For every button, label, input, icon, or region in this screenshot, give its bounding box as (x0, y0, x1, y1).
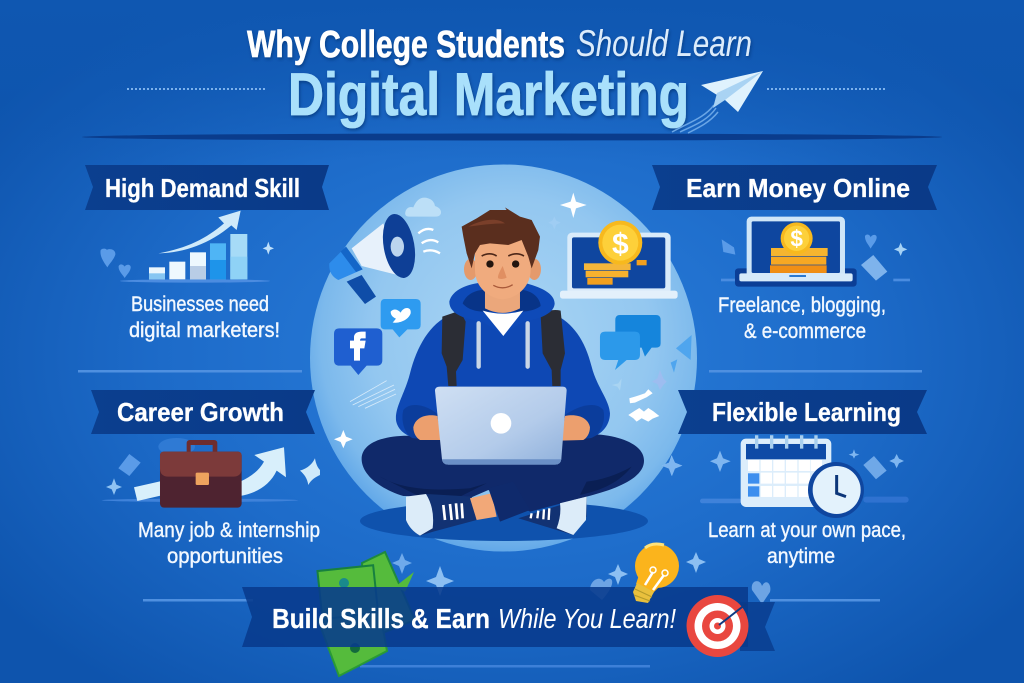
text: businesses need: Businesses need (131, 293, 269, 316)
text: freelance: Freelance, blogging, (718, 294, 886, 317)
shoe left (406, 494, 477, 536)
backpack straps (442, 311, 466, 386)
panel: high demand skill (85, 165, 329, 342)
laptop (435, 387, 567, 465)
icon: light bulb (633, 544, 679, 603)
panel: earn money online (652, 165, 937, 343)
hands (413, 415, 442, 440)
ribbon: flexible learning (678, 390, 927, 434)
text: learn at your own pace: anytime (767, 545, 835, 568)
icon: decorative sparkles and hearts near banner (392, 552, 770, 604)
central disc (310, 164, 697, 552)
ears (464, 259, 477, 280)
text: many job (138, 519, 320, 568)
icon: laptop with coins (560, 221, 678, 299)
hair (462, 207, 540, 268)
ribbon: high demand skill (85, 165, 329, 210)
panel: flexible learning (662, 390, 927, 568)
text: freelance: & e-commerce (744, 320, 866, 343)
central student illustration (329, 193, 692, 541)
title (247, 23, 752, 128)
dollar sign: $ (790, 226, 803, 252)
text: businesses need (129, 293, 280, 342)
text: learn at your own pace: Learn at your own pace, (708, 519, 906, 542)
icon: megaphone (329, 211, 440, 304)
title line two: Digital Marketing (288, 61, 689, 128)
ankle (470, 493, 497, 520)
text: freelance (718, 294, 886, 343)
icon: twitter bubble (381, 299, 421, 337)
panel: career growth (91, 390, 320, 568)
title line one: Why College Students (247, 24, 565, 66)
icon: facebook bubble (334, 328, 382, 375)
icon: cloud (405, 198, 441, 217)
banner tail (740, 602, 775, 651)
banner text (272, 603, 676, 634)
scribble lines (350, 381, 396, 408)
legs (362, 434, 644, 512)
ground shadow (360, 501, 648, 541)
text: learn at your own pace (708, 519, 906, 568)
icon: briefcase and arrow (102, 438, 320, 508)
neck (485, 290, 520, 313)
text: many job: opportunities (167, 545, 283, 568)
text: many job: Many job & internship (138, 519, 320, 542)
icon: cash notes (317, 552, 415, 676)
icon: target (686, 595, 748, 657)
icon: chat bubbles (600, 315, 661, 370)
eyes (486, 260, 494, 268)
banner text: While You Learn! (498, 603, 676, 634)
heading: high demand skill: High Demand Skill (105, 173, 300, 203)
icon: calendar and clock (662, 435, 909, 518)
ribbon: earn money online (652, 165, 937, 210)
ribbon: career growth (91, 390, 315, 434)
shirt (483, 311, 523, 336)
hood (449, 283, 555, 335)
hoodie strings (479, 323, 528, 367)
shoe right (518, 497, 587, 535)
heading: career growth: Career Growth (117, 397, 284, 427)
bottom banner (242, 587, 775, 651)
icon: sparkles (334, 193, 682, 476)
banner text: Build Skills & Earn (272, 603, 490, 634)
face (475, 237, 531, 299)
cuff (488, 482, 530, 522)
hoodie body (396, 307, 610, 438)
heading: earn money online: Earn Money Online (686, 173, 910, 203)
icon: paper airplane (672, 71, 763, 133)
icon: growth chart (100, 211, 274, 283)
title line one italic: Should Learn (576, 23, 752, 64)
heading: flexible learning: Flexible Learning (712, 397, 901, 427)
banner body (242, 587, 748, 647)
icon: confetti (612, 335, 692, 422)
dollar sign: $ (612, 228, 629, 261)
icon: laptop with coins (721, 217, 910, 287)
text: businesses need: digital marketers! (129, 319, 280, 342)
student (362, 207, 644, 536)
